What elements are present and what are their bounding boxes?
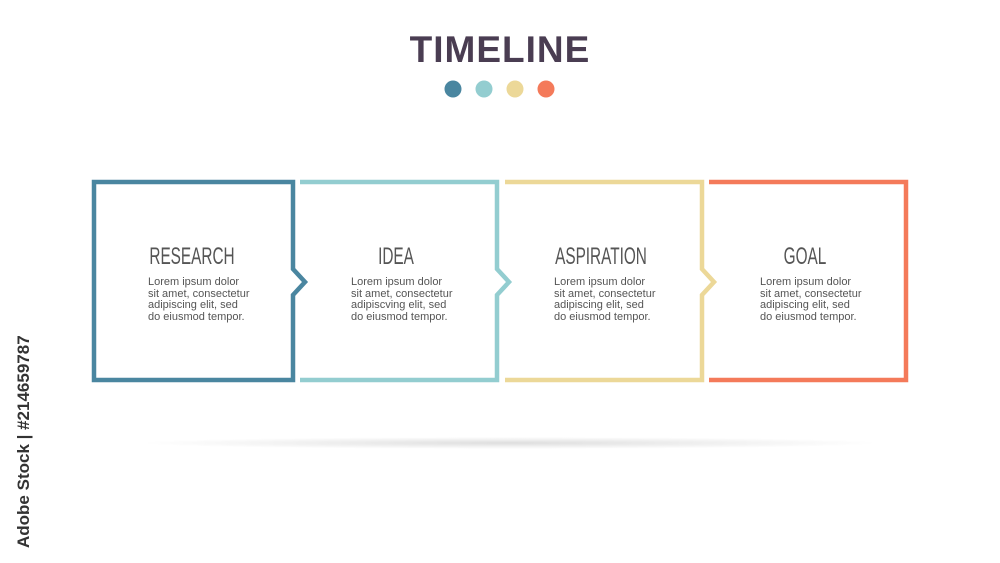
panel: goal: do eiusmod tempor. xyxy=(760,311,857,323)
panel: research: RESEARCH xyxy=(149,244,235,270)
dots legend xyxy=(444,80,554,98)
panel: research: do eiusmod tempor. xyxy=(148,311,245,323)
watermark text: Adobe Stock | #214659787 xyxy=(14,335,33,548)
panel: aspiration: Lorem ipsum dolor xyxy=(554,276,645,288)
panel: aspiration: ASPIRATION xyxy=(555,244,647,270)
panel: idea: do eiusmod tempor. xyxy=(351,311,448,323)
panel: aspiration: do eiusmod tempor. xyxy=(554,311,651,323)
panel: goal: Lorem ipsum dolor xyxy=(760,276,851,288)
panel: idea xyxy=(300,182,509,380)
panel: aspiration: sit amet, consectetur xyxy=(554,288,656,300)
panel: research xyxy=(94,182,305,380)
panel: aspiration xyxy=(505,182,714,380)
panel: research: adipiscing elit, sed xyxy=(148,299,238,311)
panel: goal: sit amet, consectetur xyxy=(760,288,862,300)
panel: idea: sit amet, consectetur xyxy=(351,288,453,300)
panel: goal: adipiscing elit, sed xyxy=(760,299,850,311)
panel: idea: adipiscving elit, sed xyxy=(351,299,446,311)
shadow xyxy=(140,437,880,449)
panel: idea: Lorem ipsum dolor xyxy=(351,276,442,288)
panel: goal xyxy=(709,182,906,380)
title: TIMELINE xyxy=(410,29,590,70)
panel: idea: IDEA xyxy=(378,244,414,270)
panel: goal: GOAL xyxy=(784,244,826,270)
panel: research: sit amet, consectetur xyxy=(148,288,250,300)
panel: aspiration: adipiscing elit, sed xyxy=(554,299,644,311)
panel: research: Lorem ipsum dolor xyxy=(148,276,239,288)
